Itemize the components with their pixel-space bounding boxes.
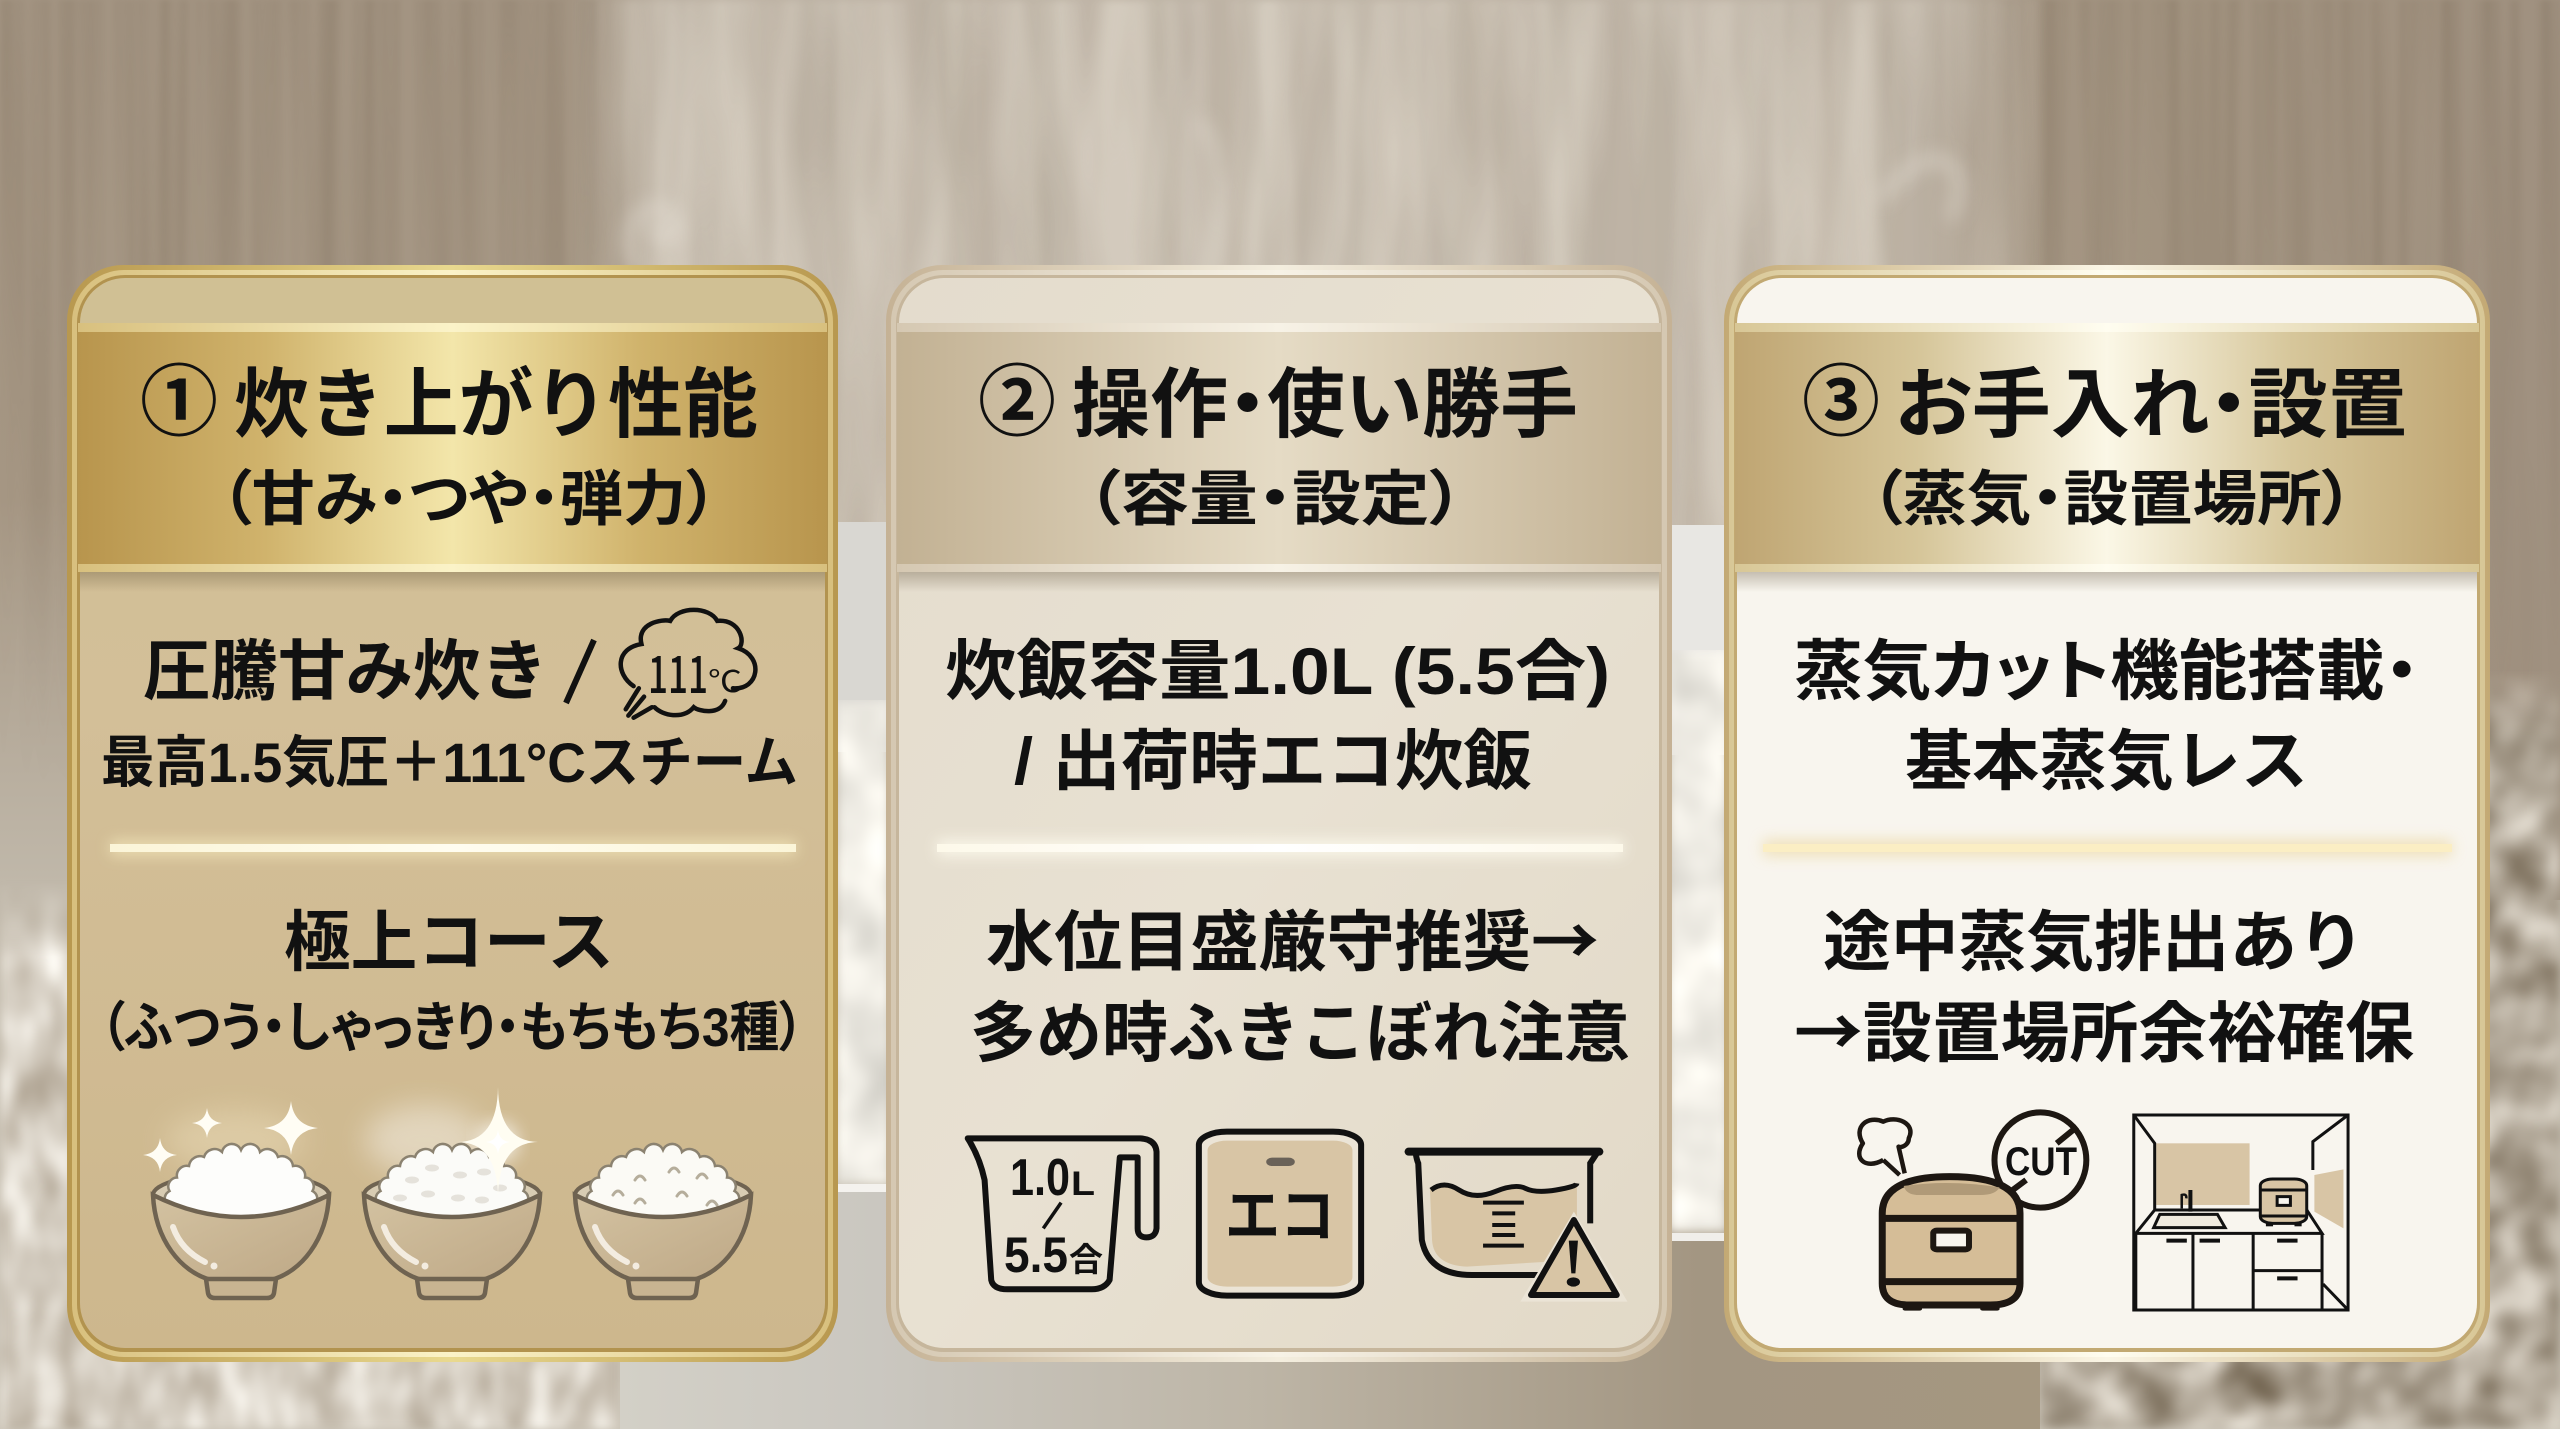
bowl: mochimochi bbox=[575, 1144, 751, 1298]
icon: eco setting button bbox=[1199, 1132, 1361, 1296]
panel 1 title text: 炊き上がり性能 bbox=[234, 363, 758, 448]
background: white rice bowl bbox=[620, 522, 2040, 1429]
slash separator bbox=[566, 640, 594, 703]
panel 2 divider bbox=[937, 840, 1623, 856]
panel 2 boil-over line: 多め時ふきこぼれ注意 bbox=[970, 996, 1630, 1070]
panel 1: cooking performance bbox=[67, 265, 838, 1362]
panel 1 spec line: 最高1.5気圧＋111°Cスチーム bbox=[101, 731, 798, 794]
panel 1 course heading: 極上コース bbox=[284, 905, 614, 979]
panel 1 header band bbox=[78, 323, 827, 592]
icon: measuring cup: 5.5 bbox=[1004, 1227, 1068, 1283]
panel 2 capacity line: 炊飯容量1.0L (5.5合) bbox=[945, 634, 1610, 708]
background: blurred rice on the right bbox=[2040, 670, 2560, 1429]
panel 1 number: ① bbox=[140, 340, 218, 452]
background: blurred rice on the left bbox=[0, 880, 620, 1429]
panel 2 header band bbox=[897, 323, 1661, 592]
panel 1 divider bbox=[110, 840, 796, 856]
panel 2 eco line: / 出荷時エコ炊飯 bbox=[1014, 724, 1532, 798]
icon: measuring cup: L bbox=[1071, 1165, 1095, 1203]
panel 3 steam cut line: 蒸気カット機能搭載・ bbox=[1794, 634, 2419, 708]
panel 3 number: ③ bbox=[1802, 340, 1880, 452]
panel 2 frame bbox=[886, 265, 1672, 1362]
icon: steam cloud 111°C: 111 bbox=[648, 636, 708, 708]
icon: eco setting button: エコ bbox=[1225, 1183, 1335, 1250]
icon: steam cloud 111°C bbox=[621, 610, 755, 718]
panel 2 water level line: 水位目盛厳守推奨 → bbox=[986, 889, 1599, 985]
panel 3 title: お手入れ・設置 bbox=[1895, 363, 2407, 448]
icon: rice cooker with steam cut bbox=[1859, 1112, 2086, 1311]
icon: kitchen installation space bbox=[2134, 1115, 2348, 1310]
bowl: shakkiri with bright sparkle bbox=[364, 1087, 540, 1298]
panel 2 title: 操作・使い勝手 bbox=[1072, 363, 1578, 448]
panel 3 steamless line: 基本蒸気レス bbox=[1905, 724, 2308, 798]
icon: steam cloud 111°C: ℃ bbox=[708, 666, 742, 699]
icon: measuring cup: 1.0 bbox=[1010, 1149, 1070, 1207]
panel 3 header band bbox=[1735, 323, 2479, 592]
panel 3 steam discharge line: 途中蒸気排出あり bbox=[1823, 905, 2365, 979]
background: rising steam bbox=[584, 0, 2034, 525]
panel 3 divider bbox=[1763, 840, 2452, 856]
panel 3: maintenance and installation bbox=[1724, 265, 2490, 1362]
icon: water pot with warning bbox=[1409, 1152, 1627, 1302]
panel 3 frame bbox=[1724, 265, 2490, 1362]
panel 1 frame bbox=[67, 265, 838, 1362]
bowl: futsuu with sparkles bbox=[143, 1101, 329, 1298]
icon: measuring cup bbox=[968, 1138, 1157, 1289]
panel 1 subtitle: （甘み・つや・弾力） bbox=[220, 466, 718, 533]
panel 2 subtitle: （容量・設定） bbox=[1086, 466, 1464, 533]
icons: three rice bowls bbox=[143, 1087, 751, 1298]
panel 3 location line: →設置場所余裕確保 bbox=[1794, 980, 2414, 1076]
panel 1 course list: （ふつう・しゃっきり・もちもち3種） bbox=[100, 998, 804, 1058]
icon: measuring cup: 合 bbox=[1069, 1241, 1103, 1278]
panel 3 subtitle: （蒸気・設置場所） bbox=[1870, 466, 2354, 533]
panel 1 feature line: 圧騰甘み炊き bbox=[143, 634, 548, 708]
icon: rice cooker with steam cut: CUT bbox=[2005, 1140, 2077, 1184]
panel 2 number: ② bbox=[978, 340, 1056, 452]
panel 2: operation and usability bbox=[886, 265, 1672, 1362]
